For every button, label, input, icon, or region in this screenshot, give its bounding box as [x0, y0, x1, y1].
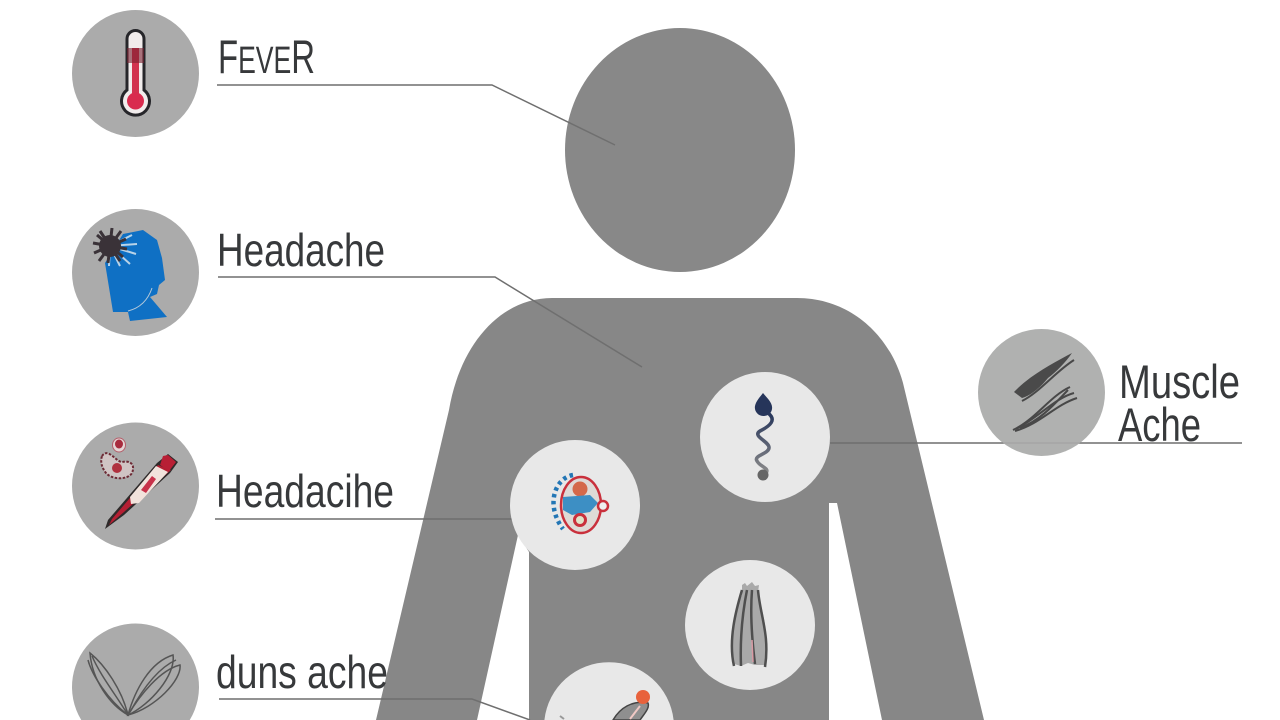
label: headacihe: Headacihe	[216, 465, 394, 517]
icon: leaf-shaped muscle fibres	[72, 623, 199, 720]
callout: headacihe	[72, 422, 394, 550]
label: muscle ache: Muscle	[1119, 355, 1240, 408]
label: duns ache: duns ache	[216, 646, 388, 698]
callout: fever	[72, 10, 315, 137]
body marker: squiggle	[700, 372, 830, 502]
icon: clinical thermometer and cells	[72, 422, 199, 550]
icon: muscle strands	[978, 329, 1105, 456]
body marker: muscle and tendon	[544, 662, 674, 720]
torso and arms	[376, 298, 984, 720]
callout: duns ache	[72, 623, 388, 720]
label: headache: Headache	[217, 224, 385, 276]
callout: headache	[72, 209, 385, 336]
body marker: cell	[510, 440, 640, 570]
icon: thermometer	[72, 10, 199, 137]
body marker: fibre bundle	[685, 560, 815, 690]
body silhouette	[376, 28, 984, 720]
head	[565, 28, 795, 272]
callout: muscle ache	[978, 329, 1240, 456]
label: ache: Ache	[1118, 398, 1201, 451]
label: fever: FEVER	[218, 30, 315, 83]
leader lines	[215, 85, 1242, 720]
icon: head with pain burst	[72, 209, 199, 336]
